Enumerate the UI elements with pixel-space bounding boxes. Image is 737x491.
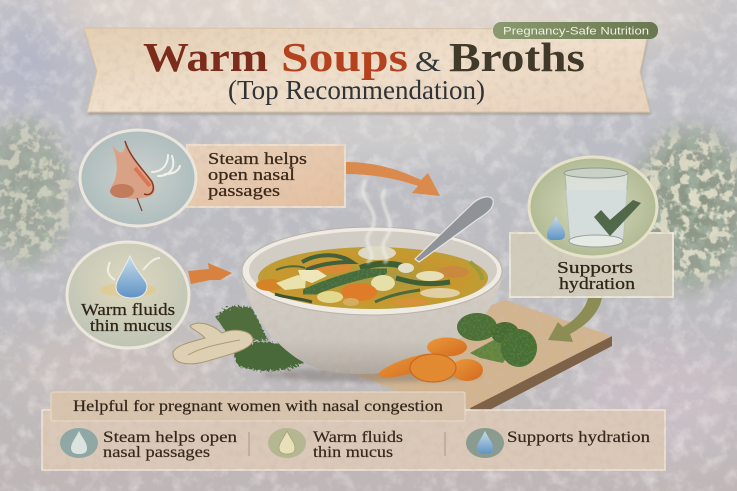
callout: supports hydration (510, 157, 673, 297)
text: warm fluids: Warm fluids (81, 300, 175, 319)
soup (256, 246, 488, 309)
callout: warm fluids thin mucus (67, 242, 189, 348)
carrots (378, 338, 483, 382)
soup bowl (242, 182, 502, 382)
spoon (415, 197, 493, 262)
label panel: hydration (559, 274, 636, 293)
title heading: Broths (449, 34, 585, 80)
title banner (84, 28, 651, 115)
label panel: Steam helps (208, 149, 307, 168)
item: supports hydration: Supports hydration (507, 429, 650, 446)
text: warm fluids (81, 300, 175, 335)
title heading: & (415, 46, 442, 78)
icon: glass of water with check (529, 157, 657, 257)
herb greens (216, 306, 304, 371)
label panel (510, 233, 673, 297)
item: steam helps open nasal passages: Steam helps open (103, 429, 237, 446)
bottom panel (42, 410, 665, 470)
cutting board (330, 300, 612, 418)
tab heading: helpful for pregnant women (51, 392, 465, 421)
bowl body (242, 275, 502, 374)
label panel (187, 145, 345, 207)
tab heading: helpful for pregnant women: Helpful for pregnant women with nasal congestion (73, 398, 443, 415)
badge: Pregnancy-Safe Nutrition (493, 22, 658, 39)
item: warm fluids thin mucus (268, 428, 403, 461)
label panel: Supports (557, 258, 633, 277)
bowl rim (242, 227, 502, 315)
item: steam helps open nasal passages (60, 428, 237, 461)
item: warm fluids thin mucus: thin mucus (313, 444, 393, 461)
broccoli (457, 313, 537, 367)
item: steam helps open nasal passages: nasal passages (103, 444, 210, 461)
steam (363, 182, 390, 262)
title heading: Warm (143, 34, 268, 80)
label panel: open nasal (208, 165, 295, 184)
ginger (173, 323, 253, 364)
subtitle: (Top Recommendation) (228, 75, 485, 105)
item: warm fluids thin mucus: Warm fluids (313, 429, 403, 446)
label panel: passages (208, 181, 280, 200)
foliage right (618, 112, 737, 304)
arrow: steam to soup (346, 162, 440, 196)
icon: nose with steam (80, 130, 196, 226)
badge: Pregnancy-Safe Nutrition: Pregnancy-Safe Nutrition (503, 26, 649, 38)
text: warm fluids: thin mucus (90, 316, 172, 335)
title heading: Soups (281, 34, 408, 80)
icon: water drop (100, 256, 160, 298)
foliage left (0, 104, 86, 280)
arrow: hydration to board (548, 298, 602, 342)
callout: steam helps open nasal passages (80, 130, 345, 226)
title heading (143, 34, 585, 80)
arrow: fluids to soup (188, 263, 232, 284)
item: supports hydration (466, 428, 650, 458)
